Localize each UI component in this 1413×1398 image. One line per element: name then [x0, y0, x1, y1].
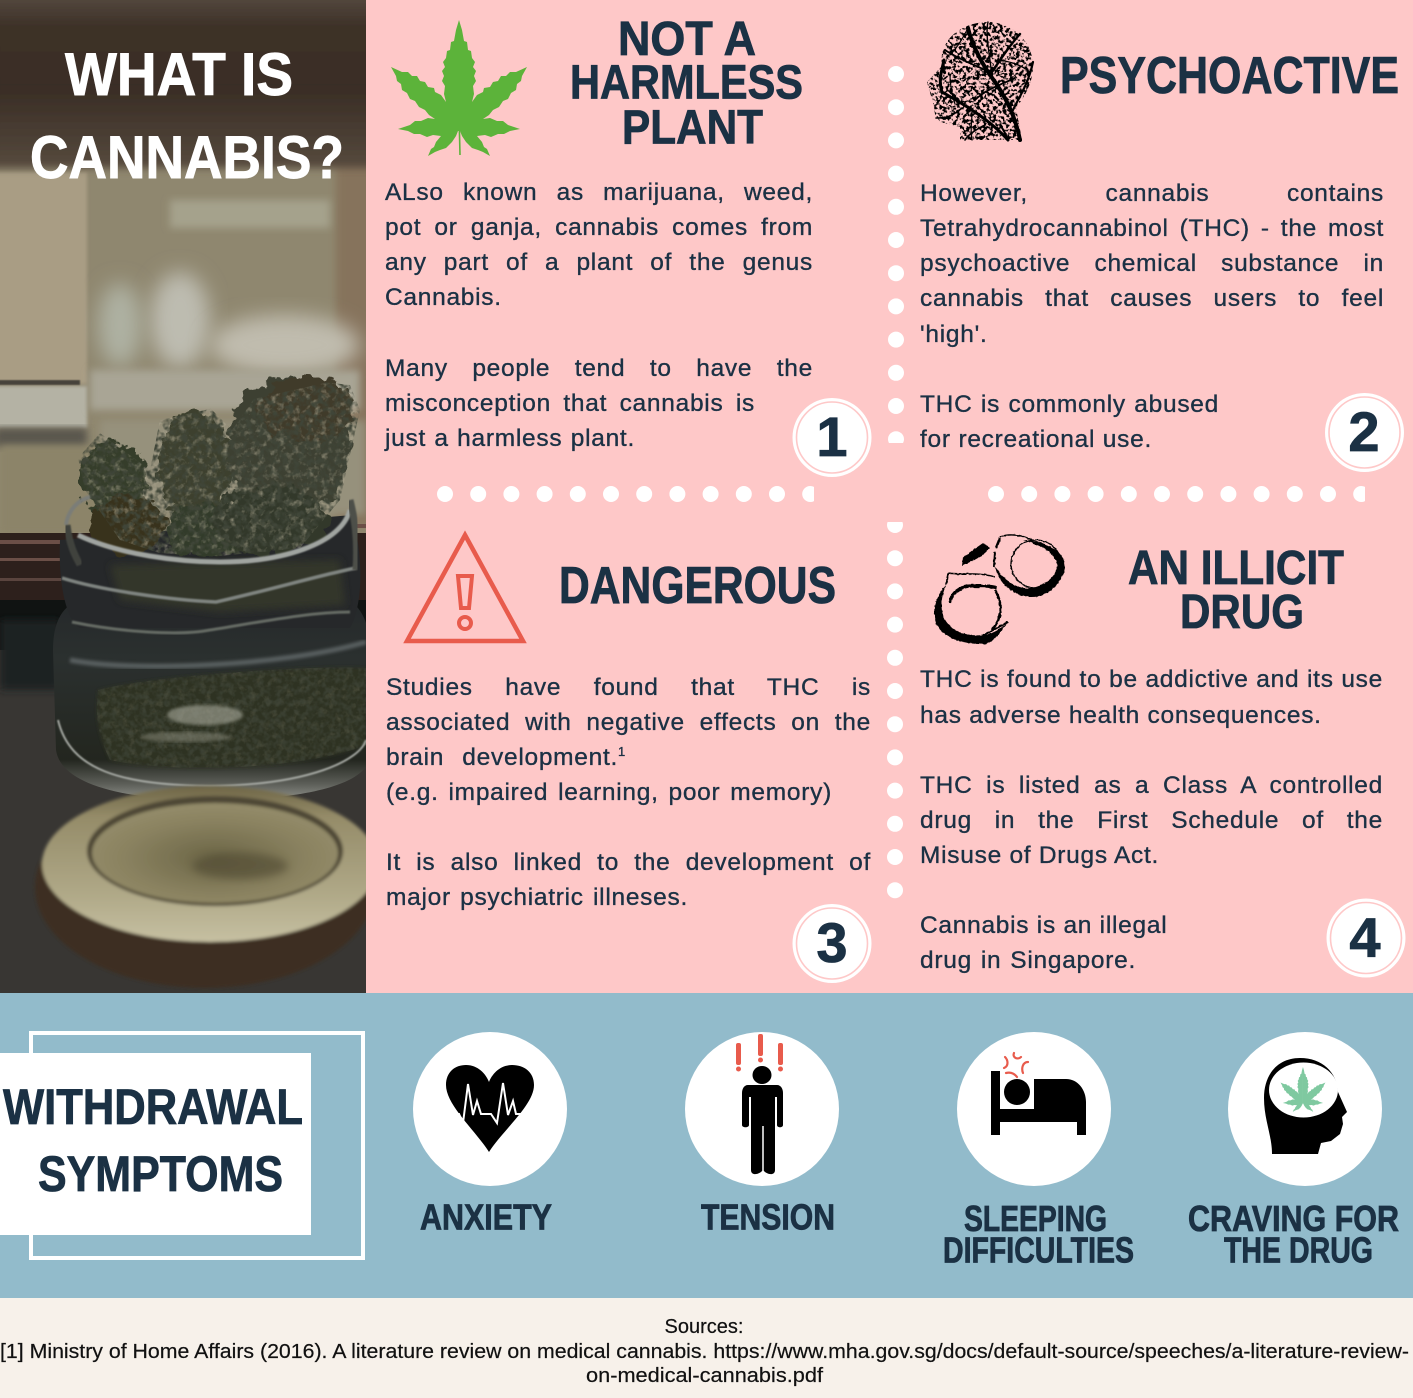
label: craving for the drug: THE DRUG: [1224, 1230, 1373, 1270]
text block: psychoactive, abuse: for recreational use.: [920, 426, 1152, 453]
buds: [79, 378, 353, 556]
text block: illicit drug, addictive: has adverse health consequences.: [920, 702, 1322, 729]
photo: cannabis buds in a glass jar: [0, 0, 378, 993]
icon: handcuffs: [934, 535, 1065, 644]
text block: psychoactive, THC: [920, 180, 1384, 348]
dotted dividers: [445, 74, 1380, 900]
text block: not a harmless plant, misconception: misconception that cannabis is: [385, 390, 755, 417]
heading: Not a harmless plant: HARMLESS: [570, 56, 803, 110]
text block: not a harmless plant, intro: any part of a plant of the genus: [385, 249, 813, 276]
lid: [35, 786, 378, 988]
heading: An illicit drug: [1128, 542, 1344, 639]
jar: [53, 598, 370, 800]
heading box: withdrawal symptoms: SYMPTOMS: [38, 1146, 283, 1202]
text block: dangerous, brain development: Studies have found that THC is: [386, 674, 871, 701]
text: Cannabis.: [385, 284, 502, 311]
badge 3: [792, 904, 872, 983]
text block: illicit drug, illegal: drug in Singapore.: [920, 947, 1136, 974]
icon: head with cannabis leaf: [1228, 1032, 1382, 1186]
badge 4: 4: [1349, 906, 1381, 969]
badge 4: [1326, 898, 1406, 978]
text block: psychoactive, THC: cannabis that causes users to feel: [920, 285, 1384, 312]
heading: Not a harmless plant: [570, 13, 803, 154]
text block: not a harmless plant, intro: pot or ganja, cannabis comes from: [385, 214, 813, 241]
text block: not a harmless plant, misconception: [384, 355, 813, 452]
text block: psychoactive, abuse: [920, 391, 1219, 453]
heading: Not a harmless plant: NOT A: [618, 13, 756, 66]
text block: psychoactive, THC: However, cannabis contains: [920, 180, 1384, 207]
label: anxiety: ANXIETY: [420, 1196, 552, 1238]
heading: Dangerous: DANGEROUS: [559, 557, 836, 615]
icon: restless person in bed: [957, 1032, 1111, 1186]
heading: What is Cannabis?: [30, 41, 344, 191]
text block: dangerous, brain development: [386, 674, 871, 806]
label: sleeping difficulties: SLEEPING: [964, 1198, 1107, 1239]
panel: withdrawal symptoms band: [0, 993, 1413, 1298]
badge 2: 2: [1348, 400, 1380, 463]
text block: psychoactive, THC: Tetrahydrocannabinol (THC) - the most: [920, 215, 1384, 242]
heading: What is Cannabis?: WHAT IS: [65, 41, 293, 108]
text block: psychoactive, THC: 'high'.: [920, 321, 988, 348]
icon: head filled with tree branches: [927, 22, 1033, 140]
icon: tense person: [685, 1032, 839, 1186]
text block: illicit drug, class A: [920, 772, 1383, 869]
text block: dangerous, brain development: (e.g. impaired learning, poor memory): [386, 779, 832, 806]
heading: What is Cannabis?: CANNABIS?: [30, 124, 344, 191]
label: tension: TENSION: [701, 1196, 835, 1238]
badge 2: [1325, 393, 1404, 472]
text block: illicit drug, class A: THC is listed as a Class A controlled: [920, 772, 1383, 799]
text block: psychoactive, THC: psychoactive chemical substance in: [920, 250, 1384, 277]
text block: illicit drug, illegal: [920, 912, 1167, 974]
icon: cannabis leaf: [391, 20, 527, 156]
text block: not a harmless plant, intro: ALso known as marijuana, weed,: [385, 179, 813, 206]
heading box: withdrawal symptoms: [0, 1033, 363, 1258]
heading: Not a harmless plant: PLANT: [622, 102, 763, 154]
text block: dangerous, brain development: brain development.1: [386, 744, 626, 771]
text block: illicit drug, class A: drug in the First Schedule of the: [920, 807, 1383, 834]
text block: not a harmless plant, misconception: just a harmless plant.: [385, 425, 635, 452]
text block: dangerous, psychiatric illnesses: It is also linked to the development of: [386, 849, 871, 876]
text block: not a harmless plant, misconception: Many people tend to have the: [385, 355, 813, 382]
label: craving for the drug: [1188, 1198, 1399, 1270]
badge 1: 1: [816, 405, 848, 468]
icon: anxiety heart with pulse: [413, 1032, 567, 1186]
badge 1: [792, 398, 872, 477]
panel: sources footer: [1] Ministry of Home Affairs (2016). A literature review on medical cannabis. https://www.mha.gov.sg/docs/default-source/speeches/a-literature-review-: [0, 1341, 1409, 1363]
text block: psychoactive, abuse: THC is commonly abused: [920, 391, 1219, 418]
text block: dangerous, brain development: associated with negative effects on the: [386, 709, 871, 736]
panel: sources footer: on-medical-cannabis.pdf: [586, 1365, 823, 1387]
text block: illicit drug, addictive: [920, 666, 1383, 729]
heading: An illicit drug: AN ILLICIT: [1128, 542, 1344, 595]
text block: illicit drug, addictive: THC is found to be addictive and its use: [920, 666, 1383, 693]
text block: dangerous, psychiatric illnesses: [386, 849, 871, 911]
heading: An illicit drug: DRUG: [1180, 586, 1304, 639]
badge 3: 3: [816, 911, 848, 974]
label: sleeping difficulties: [943, 1198, 1134, 1270]
heading box: withdrawal symptoms: WITHDRAWAL: [3, 1079, 303, 1135]
text block: dangerous, psychiatric illnesses: major psychiatric illneses.: [386, 884, 688, 911]
icon: warning triangle: [407, 535, 523, 641]
text block: illicit drug, illegal: Cannabis is an illegal: [920, 912, 1167, 939]
panel: sources footer: Sources:: [665, 1316, 743, 1338]
text block: illicit drug, class A: Misuse of Drugs Act.: [920, 842, 1159, 869]
panel: sources footer: [0, 1298, 1413, 1398]
text block: not a harmless plant, intro: [384, 179, 813, 311]
rim: [78, 510, 350, 562]
label: sleeping difficulties: DIFFICULTIES: [943, 1230, 1134, 1270]
panel: pink background: [366, 0, 1413, 993]
